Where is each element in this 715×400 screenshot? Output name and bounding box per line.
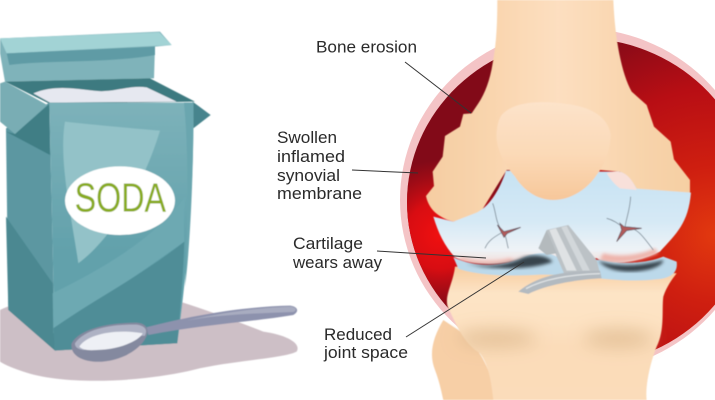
box back flap: [0, 32, 172, 82]
worn cartilage tint left: [458, 257, 515, 264]
soda label: [65, 166, 175, 235]
left and right flaps: [0, 82, 47, 134]
label: synovial membrane: membrane: [277, 185, 362, 203]
cartilage femoral: [433, 171, 691, 264]
tibia: [447, 267, 677, 400]
worn cartilage tint right: [600, 248, 658, 262]
joint space right: [598, 260, 663, 272]
label: synovial membrane: Swollen: [277, 129, 337, 147]
patella: [496, 102, 611, 200]
crack left: [485, 203, 521, 248]
joint space left: [467, 256, 553, 268]
label: cartilage: wears away: [292, 254, 383, 272]
box inside and powder: [5, 78, 195, 104]
label: synovial membrane: inflamed: [277, 148, 345, 166]
lower ligament fibres: [518, 271, 602, 294]
label: synovial membrane: [277, 129, 418, 203]
label: joint space: joint space: [323, 344, 408, 362]
femur: [426, 0, 690, 222]
spoon: [71, 306, 297, 362]
label: synovial membrane: synovial: [277, 167, 340, 185]
label: cartilage: Cartilage: [293, 235, 363, 253]
label: joint space: Reduced: [324, 326, 392, 344]
illustration: soda box and spoon: [0, 32, 298, 381]
tibia shadow right: [583, 330, 653, 347]
box front shading: [53, 197, 185, 333]
box highlight: [63, 122, 160, 263]
soda label: SODA: [75, 175, 167, 221]
eroded pink patch: [607, 171, 637, 190]
meniscus: [453, 253, 677, 281]
fibula: [432, 320, 495, 400]
ligament: [538, 225, 600, 273]
box shadow: [0, 302, 298, 381]
swollen joint capsule: [400, 32, 715, 356]
knee illustration: [426, 0, 691, 400]
box left side: [6, 103, 55, 351]
tibia shadow left: [457, 330, 537, 347]
label: cartilage: [292, 235, 486, 272]
label: joint space: [323, 262, 524, 362]
box front: [49, 103, 193, 351]
label: bone erosion: [316, 38, 471, 113]
label: bone erosion: Bone erosion: [316, 38, 417, 56]
crack right: [607, 197, 653, 250]
